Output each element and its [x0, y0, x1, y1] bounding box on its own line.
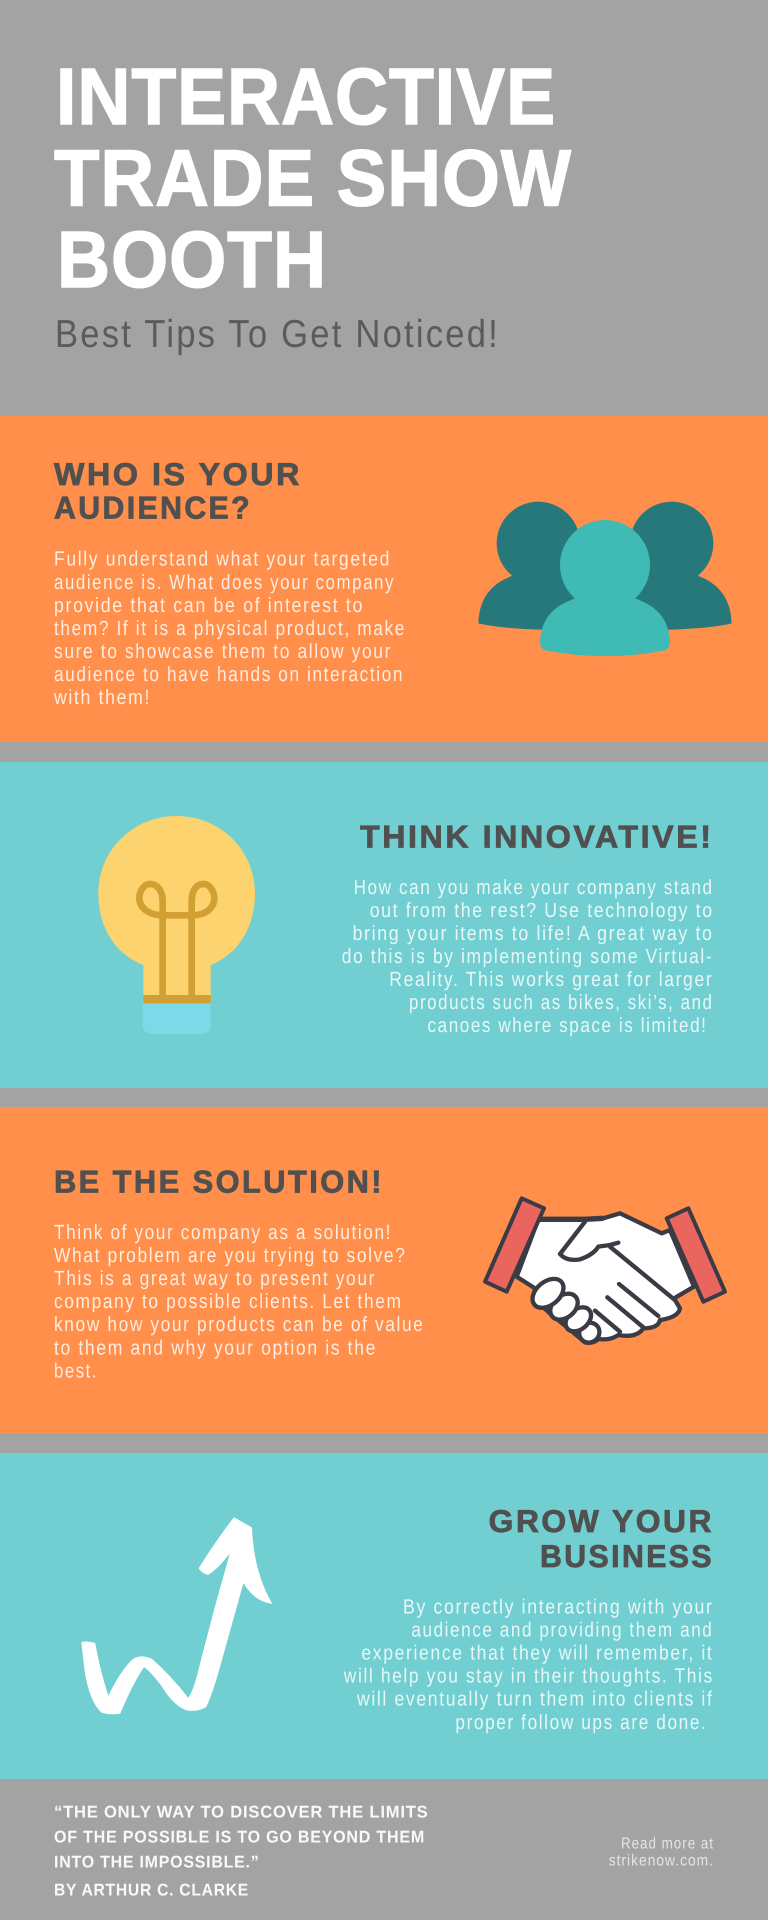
body text: Think of your company as a solution!	[54, 1221, 392, 1244]
heading	[54, 456, 302, 526]
body text: sure to showcase them to allow your	[54, 640, 392, 663]
body text: products such as bikes, ski’s, and	[409, 991, 714, 1014]
body text: By correctly interacting with your	[403, 1595, 714, 1618]
body text	[343, 1595, 714, 1734]
subtitle: Best Tips To Get Noticed!	[55, 313, 500, 356]
panel: grow your business	[0, 1453, 768, 1779]
read more link text	[609, 1835, 714, 1870]
quote: BY ARTHUR C. CLARKE	[54, 1881, 249, 1900]
quote: “THE ONLY WAY TO DISCOVER THE LIMITS	[54, 1803, 428, 1822]
panel: be the solution	[0, 1107, 768, 1433]
heading	[489, 1503, 714, 1574]
heading: THINK INNOVATIVE!	[360, 819, 714, 855]
body text: best.	[54, 1359, 98, 1382]
body text: will eventually turn them into clients if	[356, 1688, 714, 1711]
body text: out from the rest? Use technology to	[370, 899, 714, 922]
title: INTERACTIVE	[56, 52, 556, 141]
body text: to them and why your option is the	[54, 1336, 377, 1359]
title: TRADE SHOW	[54, 134, 572, 222]
panel: who is your audience	[0, 416, 768, 742]
panel background	[0, 1453, 768, 1779]
body text: do this is by implementing some Virtual-	[342, 945, 713, 968]
panel: header	[54, 52, 572, 356]
heading: GROW YOUR	[489, 1503, 714, 1539]
panel background	[0, 416, 768, 742]
icon: audience people	[478, 502, 732, 656]
heading: BUSINESS	[540, 1538, 714, 1574]
read more link text: Read more at	[621, 1835, 714, 1852]
body text: bring your items to life! A great way to	[353, 922, 714, 945]
body text: audience to have hands on interaction	[54, 663, 404, 686]
heading: WHO IS YOUR	[54, 456, 302, 492]
body text: experience that they will remember, it	[361, 1642, 713, 1664]
panel: think innovative	[0, 762, 768, 1088]
body text	[342, 876, 714, 1037]
body text: audience and providing them and	[411, 1618, 713, 1641]
body text: provide that can be of interest to	[54, 594, 364, 617]
body text: Reality. This works great for larger	[389, 968, 713, 991]
title	[54, 52, 572, 304]
heading: BE THE SOLUTION!	[54, 1164, 384, 1200]
body text: This is a great way to present your	[54, 1267, 376, 1290]
body text: company to possible clients. Let them	[54, 1290, 402, 1313]
quote: OF THE POSSIBLE IS TO GO BEYOND THEM	[54, 1827, 425, 1846]
icon: growth arrow	[82, 1518, 272, 1714]
heading: AUDIENCE?	[54, 490, 252, 526]
body text: canoes where space is limited!	[428, 1014, 708, 1037]
body text: Fully understand what your targeted	[54, 548, 391, 571]
body text	[54, 1221, 424, 1382]
quote	[54, 1803, 428, 1900]
read more link text: strikenow.com.	[609, 1853, 714, 1870]
panel background	[0, 762, 768, 1088]
body text: audience is. What does your company	[54, 571, 395, 594]
body text: What problem are you trying to solve?	[54, 1244, 406, 1267]
body text: with them!	[53, 686, 151, 709]
icon: handshake	[485, 1198, 725, 1347]
panel background	[0, 1107, 768, 1433]
body text: know how your products can be of value	[54, 1313, 424, 1336]
panel: footer	[54, 1803, 714, 1900]
quote: INTO THE IMPOSSIBLE.”	[54, 1852, 260, 1871]
body text: will help you stay in their thoughts. This	[343, 1665, 714, 1688]
body text: them? If it is a physical product, make	[54, 617, 406, 640]
body text	[53, 548, 406, 709]
icon: light bulb	[98, 816, 255, 1034]
body text: proper follow ups are done.	[455, 1711, 707, 1734]
title: BOOTH	[57, 215, 327, 304]
